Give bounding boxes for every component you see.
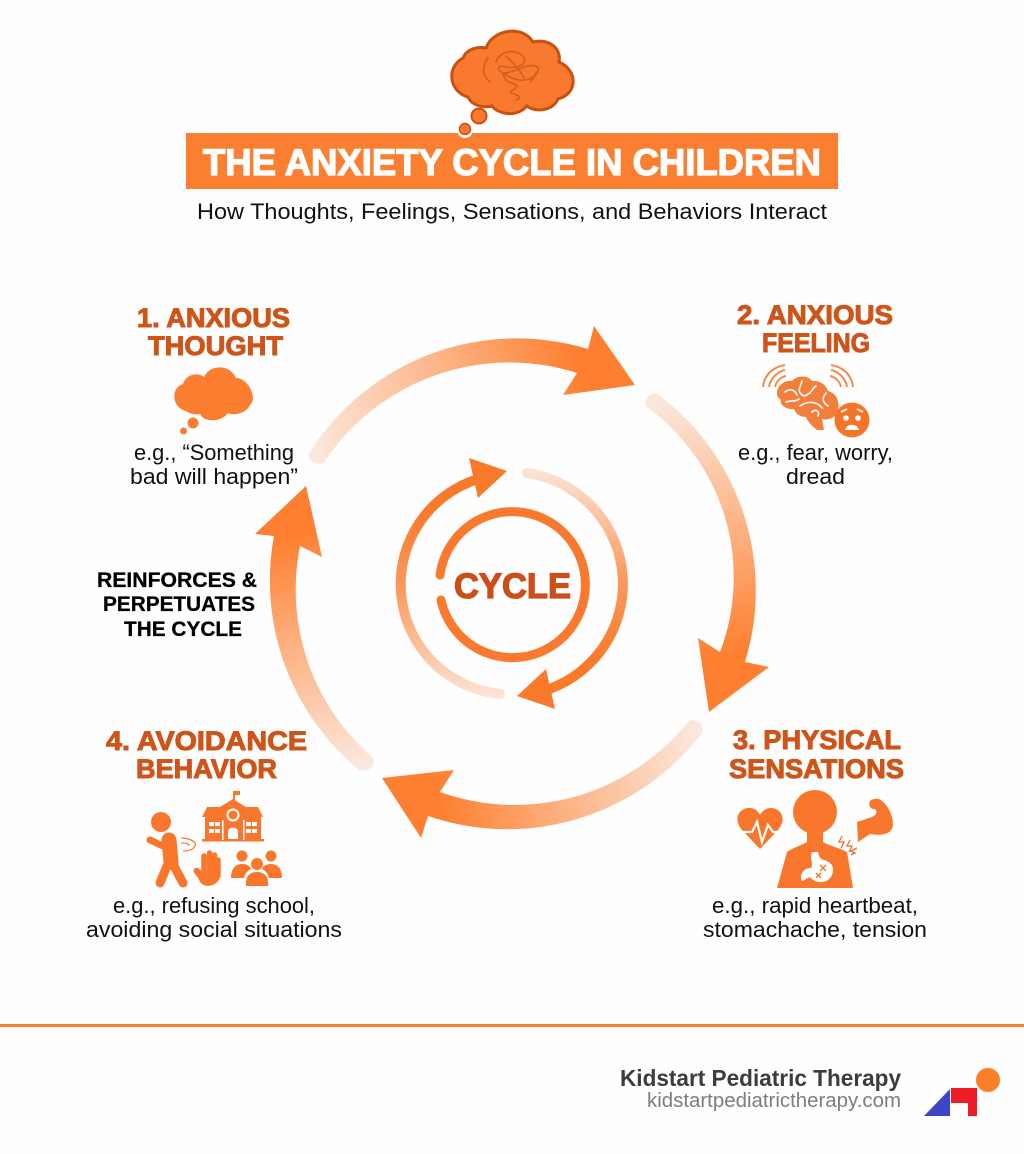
icon: stop hand <box>194 853 220 886</box>
arrow: thought to feeling <box>309 326 635 464</box>
subtitle: How Thoughts, Feelings, Sensations, and Behaviors Interact <box>197 199 827 224</box>
example text: avoiding social situations <box>86 917 342 942</box>
heading: SENSATIONS <box>729 754 904 784</box>
callout: reinforces the cycle: REINFORCES & <box>97 568 257 592</box>
heading: 2. ANXIOUS <box>737 300 893 330</box>
icon: heart with pulse <box>736 808 785 849</box>
arrow: avoidance to thought <box>255 486 374 771</box>
example text <box>738 440 893 489</box>
example text: bad will happen” <box>130 464 298 489</box>
icon: school <box>202 791 264 842</box>
icon: swoosh <box>181 838 195 851</box>
example text <box>703 893 927 942</box>
arrow: feeling to sensations <box>645 394 769 712</box>
icon: cloud <box>174 367 253 434</box>
step 2: anxious feeling <box>737 300 893 489</box>
heading: 3. PHYSICAL <box>733 725 901 755</box>
icon: brain with sad face <box>763 365 870 438</box>
example text: e.g., fear, worry, <box>738 440 893 465</box>
step 4: avoidance behavior <box>86 726 342 942</box>
footer brand text <box>620 1065 901 1112</box>
icon: thought cloud with scribble <box>452 31 573 124</box>
title banner <box>186 122 838 189</box>
callout: reinforces the cycle: PERPETUATES <box>103 592 255 616</box>
center label: CYCLE <box>454 567 571 606</box>
footer rule <box>0 1024 1024 1027</box>
example text: e.g., “Something <box>134 440 294 465</box>
arrow: sensations to avoidance <box>382 720 703 838</box>
footer brand text: kidstartpediatrictherapy.com <box>647 1090 901 1112</box>
example text <box>86 893 342 942</box>
icon: tension bolts <box>839 836 857 855</box>
example text: e.g., refusing school, <box>113 893 315 918</box>
icon: walking child <box>150 812 183 883</box>
icon: flexed arm <box>857 799 893 842</box>
heading <box>106 726 307 784</box>
heading <box>737 300 893 358</box>
heading: THOUGHT <box>148 331 284 361</box>
heading: 1. ANXIOUS <box>137 303 290 333</box>
heading: BEHAVIOR <box>136 754 277 784</box>
step 3: physical sensations <box>703 725 927 942</box>
heading <box>137 303 290 361</box>
example text: stomachache, tension <box>703 917 927 942</box>
footer brand text: Kidstart Pediatric Therapy <box>620 1065 901 1091</box>
step 1: anxious thought <box>130 303 298 489</box>
example text: e.g., rapid heartbeat, <box>712 893 918 918</box>
icon: group of people <box>231 850 282 886</box>
inner arrow: right <box>517 473 623 709</box>
callout: reinforces the cycle: THE CYCLE <box>124 617 242 641</box>
inner arrow: left <box>401 458 507 694</box>
callout: reinforces the cycle <box>97 568 257 641</box>
example text: dread <box>786 464 845 489</box>
inner ring <box>440 512 585 658</box>
heading: FEELING <box>762 328 870 358</box>
footer logo <box>924 1068 1000 1116</box>
heading <box>729 725 904 784</box>
heading: 4. AVOIDANCE <box>106 726 307 756</box>
center cycle icon <box>401 458 623 709</box>
title banner: THE ANXIETY CYCLE IN CHILDREN <box>203 142 821 183</box>
example text <box>130 440 298 489</box>
icon: body with stomach <box>777 790 853 888</box>
